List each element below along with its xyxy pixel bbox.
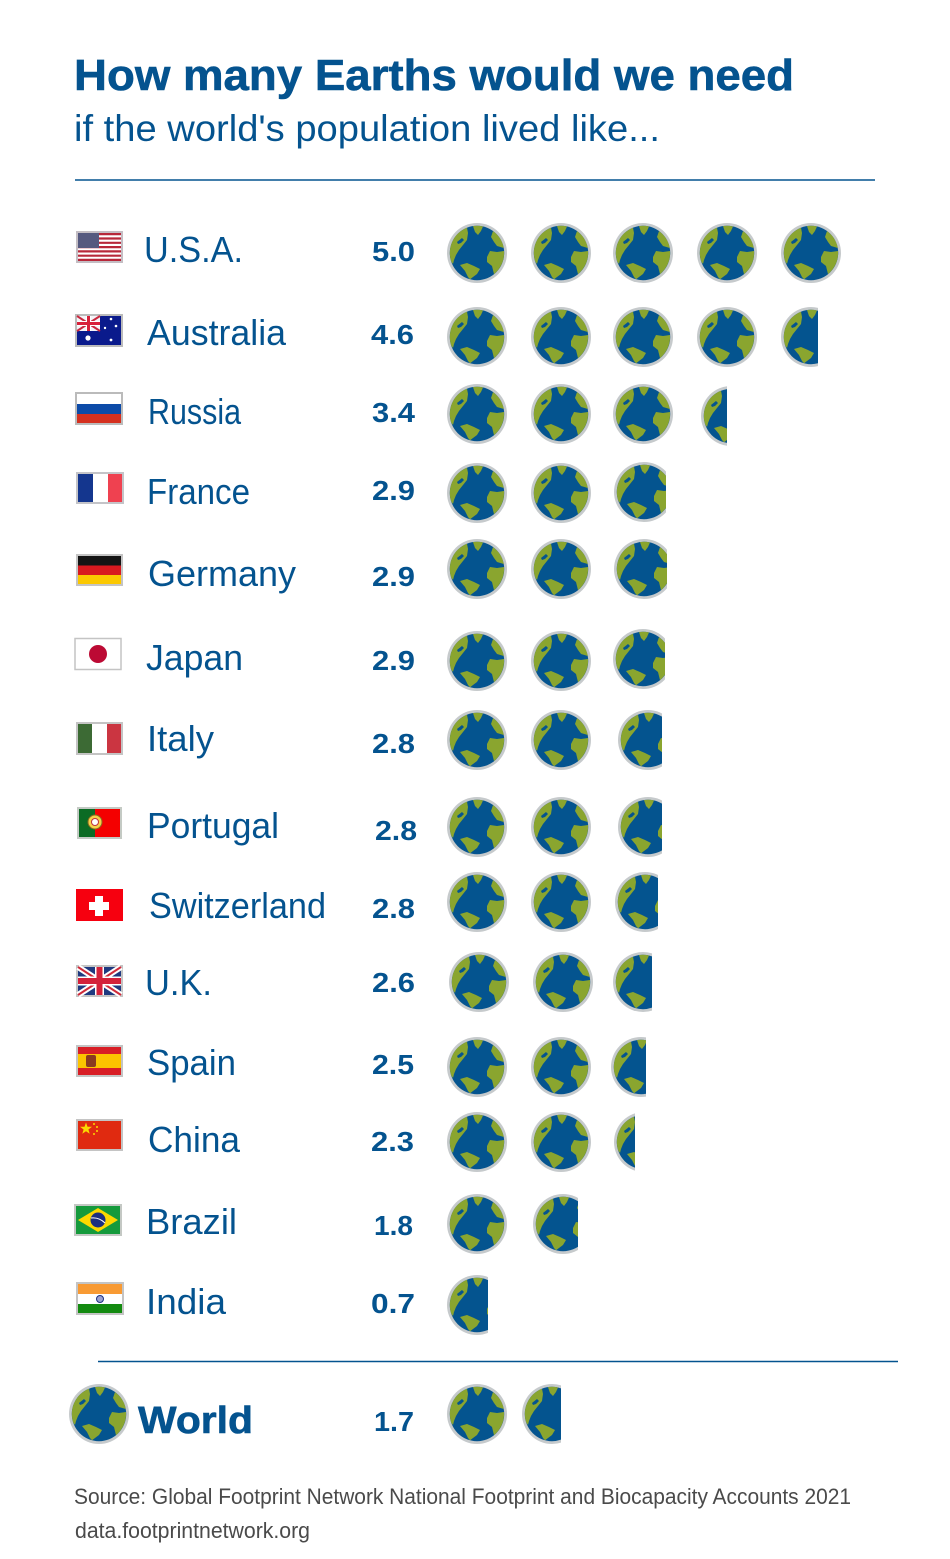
source text: data.footprintnetwork.org [75, 1518, 310, 1543]
globes: 2.9 [447, 539, 674, 599]
country name: Italy: Italy [147, 718, 214, 759]
value: 2.9: 2.9 [372, 475, 415, 506]
row: Brazil [74, 1194, 593, 1254]
country name: Russia: Russia [148, 391, 242, 432]
country name: Germany: Germany [148, 553, 296, 594]
flag: U.S.A. [76, 231, 123, 263]
globes: 0.7 [447, 1275, 488, 1335]
row: Spain [76, 1037, 671, 1097]
row: Switzerland [76, 872, 675, 932]
globes: 1.8 [447, 1194, 578, 1254]
flag: Russia [75, 392, 123, 425]
row: Italy [76, 710, 678, 770]
country name: Brazil: Brazil [146, 1201, 237, 1242]
flag: India [76, 1282, 124, 1315]
country name: India: India [146, 1281, 227, 1322]
globes: 2.9 [447, 462, 674, 523]
flag: Portugal [77, 807, 122, 839]
source text: Source: Global Footprint Network National Footprint and Biocapacity Accounts 2021 [74, 1484, 851, 1509]
row: France [76, 462, 674, 523]
globes: 2.8 [447, 872, 675, 932]
globes: 5.0 [447, 223, 841, 283]
country name: Australia: Australia [147, 312, 287, 353]
title: How many Earths would we need [74, 51, 794, 100]
value: 2.6: 2.6 [372, 967, 415, 998]
globes: 2.6 [449, 952, 673, 1012]
row: China [76, 1112, 674, 1172]
flag: Australia [75, 314, 123, 347]
value: 4.6: 4.6 [371, 319, 414, 350]
globes: 1.7 [447, 1384, 561, 1444]
country name: Japan: Japan [146, 637, 243, 678]
globes: 2.9 [447, 629, 673, 691]
icon: world globe [69, 1384, 129, 1444]
flag: France [76, 472, 124, 504]
flag: Spain [76, 1045, 123, 1077]
row: U.K. [76, 952, 673, 1012]
row: World [69, 1384, 582, 1444]
value: 5.0: 5.0 [372, 236, 415, 267]
source text [74, 1484, 851, 1543]
value: 1.8: 1.8 [374, 1210, 413, 1241]
country name: Portugal: Portugal [147, 805, 279, 846]
country name: China: China [148, 1119, 241, 1160]
country name: France: France [147, 471, 250, 512]
country name: Switzerland: Switzerland [149, 885, 326, 926]
row: Portugal [77, 797, 678, 857]
value: 1.7: 1.7 [374, 1406, 414, 1437]
country name: U.K.: U.K. [145, 962, 212, 1003]
label: World: World [138, 1400, 253, 1442]
row: Germany [76, 539, 674, 599]
value: 2.9: 2.9 [372, 561, 415, 592]
globes: 4.6 [447, 307, 841, 367]
row: Australia [75, 307, 841, 367]
globes: 3.4 [447, 384, 727, 446]
flag: Switzerland [76, 889, 123, 921]
flag: Italy [76, 722, 123, 755]
value: 0.7: 0.7 [371, 1288, 415, 1319]
flag: Brazil [74, 1204, 122, 1236]
row: Japan [75, 629, 673, 691]
row: India [76, 1275, 507, 1335]
country name: Spain: Spain [147, 1042, 236, 1083]
globes: 2.5 [447, 1037, 646, 1097]
row: Russia [75, 384, 761, 446]
flag: U.K. [76, 965, 123, 997]
subtitle: if the world's population lived like... [74, 108, 660, 149]
value: 2.8: 2.8 [372, 728, 415, 759]
flag: Germany [76, 554, 123, 586]
country name: U.S.A.: U.S.A. [144, 229, 243, 270]
row: U.S.A. [76, 223, 841, 283]
value: 2.8: 2.8 [375, 815, 417, 846]
value: 2.3: 2.3 [371, 1126, 414, 1157]
globes: 2.8 [447, 797, 678, 857]
value: 3.4: 3.4 [372, 397, 415, 428]
globes: 2.8 [447, 710, 678, 770]
value: 2.8: 2.8 [372, 893, 415, 924]
flag: China [76, 1119, 123, 1151]
value: 2.5: 2.5 [372, 1049, 414, 1080]
value: 2.9: 2.9 [372, 645, 415, 676]
globes: 2.3 [447, 1112, 635, 1172]
flag: Japan [75, 638, 121, 670]
